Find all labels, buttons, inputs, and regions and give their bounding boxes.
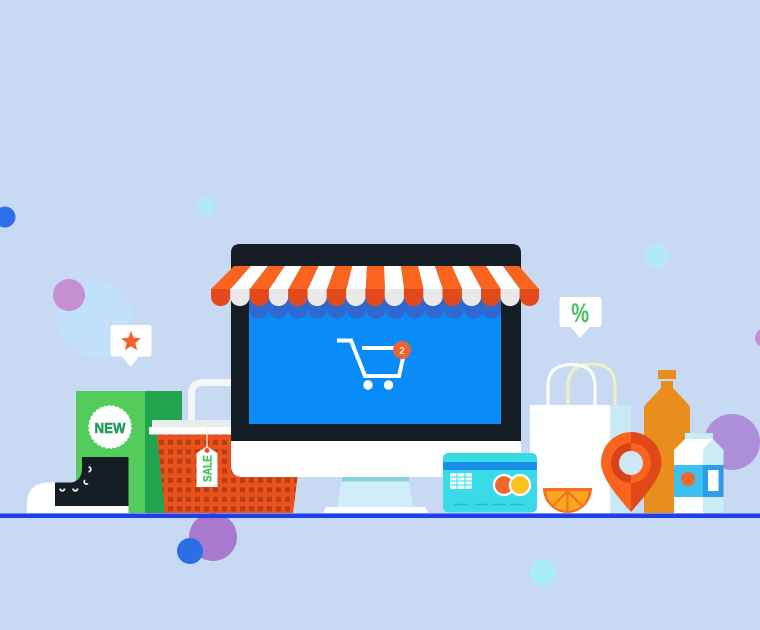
location pin (601, 432, 662, 512)
monitor frame (231, 244, 521, 441)
sneaker (27, 457, 128, 513)
monitor stand (323, 477, 428, 513)
sale tag: SALE (201, 455, 215, 482)
orange slice (543, 488, 592, 513)
credit card (443, 453, 537, 512)
awning shadow (249, 290, 501, 319)
card chip (450, 473, 472, 489)
monitor chin (231, 435, 521, 477)
badge: new: NEW (94, 421, 126, 437)
icon: shopping cart (337, 340, 411, 390)
icon: star (121, 331, 141, 350)
speech bubble: percent: % (571, 298, 589, 329)
shopping basket (149, 382, 298, 513)
speech bubble: star (110, 325, 152, 367)
sale tag (196, 420, 218, 487)
awning scallops (211, 289, 539, 306)
milk carton (674, 433, 724, 513)
screen (249, 290, 501, 424)
striped awning (211, 266, 539, 306)
bottle (644, 370, 690, 513)
shelf line (0, 514, 760, 518)
speech bubble: percent (560, 297, 602, 338)
monitor (231, 244, 521, 513)
shopping bag (530, 364, 631, 513)
decorative bubbles (0, 198, 760, 585)
product box: new (76, 391, 182, 513)
cart badge: 2 (399, 345, 405, 357)
card logo (494, 475, 530, 495)
